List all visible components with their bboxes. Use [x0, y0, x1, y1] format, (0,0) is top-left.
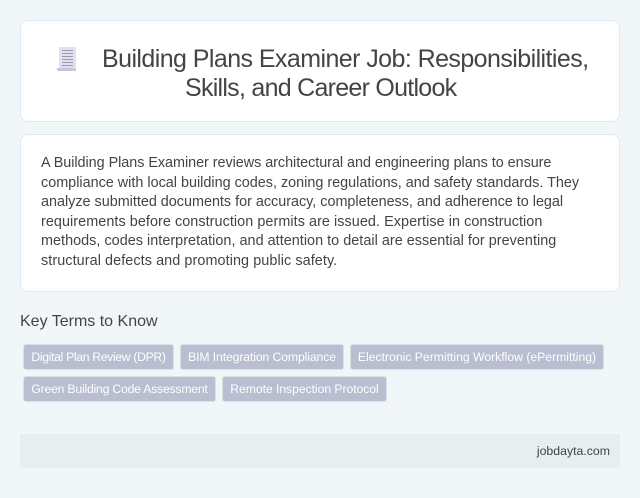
- chip: digital plan review: [23, 344, 174, 370]
- description text: requirements before construction permits are issued. Expertise in construction: [41, 214, 542, 230]
- chip: BIM integration: [180, 344, 344, 370]
- description text: methods, codes interpretation, and attention to detail are essential for preventing: [41, 233, 556, 249]
- description text: analyze submitted documents for accuracy, completeness, and adherence to legal: [41, 194, 563, 210]
- chip: remote inspection: Remote Inspection Protocol: [230, 382, 379, 396]
- icon: building plan document: [57, 47, 76, 71]
- description text: [41, 155, 579, 268]
- footer source text: jobdayta.com: [537, 444, 610, 458]
- chip: electronic permitting: [350, 344, 604, 370]
- chips: key terms: [23, 344, 604, 402]
- description text: compliance with local building codes, zoning regulations, and safety standards. They: [41, 174, 579, 190]
- title: Skills, and Career Outlook: [185, 74, 456, 102]
- chip: green building: [23, 376, 216, 402]
- chip: remote inspection: [222, 376, 387, 402]
- footer bar: [20, 434, 620, 468]
- title: Building Plans Examiner Job: Responsibilities,: [102, 45, 589, 73]
- chip: BIM integration: BIM Integration Compliance: [188, 350, 336, 364]
- chip: digital plan review: Digital Plan Review (DPR): [31, 350, 166, 364]
- chip: green building: Green Building Code Assessment: [31, 382, 208, 396]
- chip: electronic permitting: Electronic Permitting Workflow (ePermitting): [358, 350, 596, 364]
- description card: [20, 134, 620, 292]
- description text: structural defects and promoting public safety.: [41, 252, 337, 268]
- title: [102, 45, 589, 102]
- description text: A Building Plans Examiner reviews architectural and engineering plans to ensure: [41, 155, 551, 171]
- heading: key terms: Key Terms to Know: [20, 313, 158, 330]
- header card: [20, 20, 620, 122]
